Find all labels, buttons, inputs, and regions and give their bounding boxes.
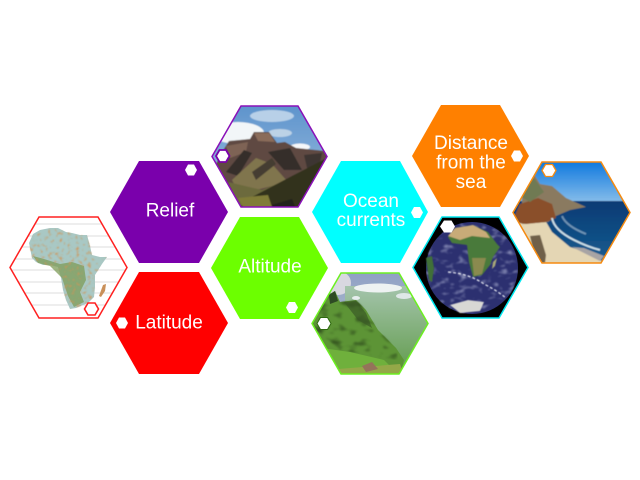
image: green valley xyxy=(310,271,430,377)
hexagon outline: beach photo xyxy=(513,162,630,263)
panel: africa map photo xyxy=(10,217,127,318)
hexagon: altitude xyxy=(211,217,328,319)
marker: earth photo xyxy=(440,220,455,232)
hexagon: distance from the sea xyxy=(412,105,529,207)
infographic: hexagon factors xyxy=(9,105,631,375)
label: distance from the sea: from the xyxy=(436,152,506,174)
marker: distance from the sea xyxy=(511,150,523,162)
marker: relief xyxy=(185,164,197,176)
panel: altitude xyxy=(211,217,328,319)
panel: earth photo xyxy=(410,215,530,321)
marker: beach photo xyxy=(542,164,556,176)
label: relief: Relief xyxy=(146,200,195,222)
image: earth from space xyxy=(414,218,528,318)
hexagon: latitude xyxy=(110,272,228,374)
hexagon outline: earth photo xyxy=(413,217,528,318)
hexagon outline: africa map xyxy=(10,217,127,318)
image: coastal beach xyxy=(510,160,632,265)
hexagon: relief xyxy=(110,161,228,263)
marker: latitude xyxy=(116,318,128,328)
panel: distance from the sea xyxy=(412,105,529,207)
image: mountain peak xyxy=(213,106,326,206)
label: distance from the sea: sea xyxy=(456,172,487,193)
label: ocean currents: currents xyxy=(337,210,405,231)
panel: latitude xyxy=(110,272,228,374)
label: distance from the sea: Distance xyxy=(434,133,508,154)
hexagon outline: mountain photo xyxy=(212,106,327,207)
hexagon: ocean currents xyxy=(312,161,428,263)
marker: altitude xyxy=(286,302,298,313)
panel: relief xyxy=(110,161,228,263)
marker: green valley photo xyxy=(317,318,331,330)
marker: mountain photo xyxy=(216,150,230,162)
panel: beach photo xyxy=(510,160,632,265)
image: africa relief map xyxy=(12,224,125,309)
label: altitude: Altitude xyxy=(238,256,302,278)
panel: mountain photo xyxy=(210,104,330,210)
label: ocean currents: Ocean xyxy=(343,191,399,212)
hexagon outline: green valley photo xyxy=(312,273,428,374)
label: latitude: Latitude xyxy=(135,312,203,334)
panel: green valley photo xyxy=(310,271,430,377)
marker: africa map xyxy=(84,303,98,315)
marker: ocean currents xyxy=(411,207,423,218)
panel: ocean currents xyxy=(312,161,428,263)
